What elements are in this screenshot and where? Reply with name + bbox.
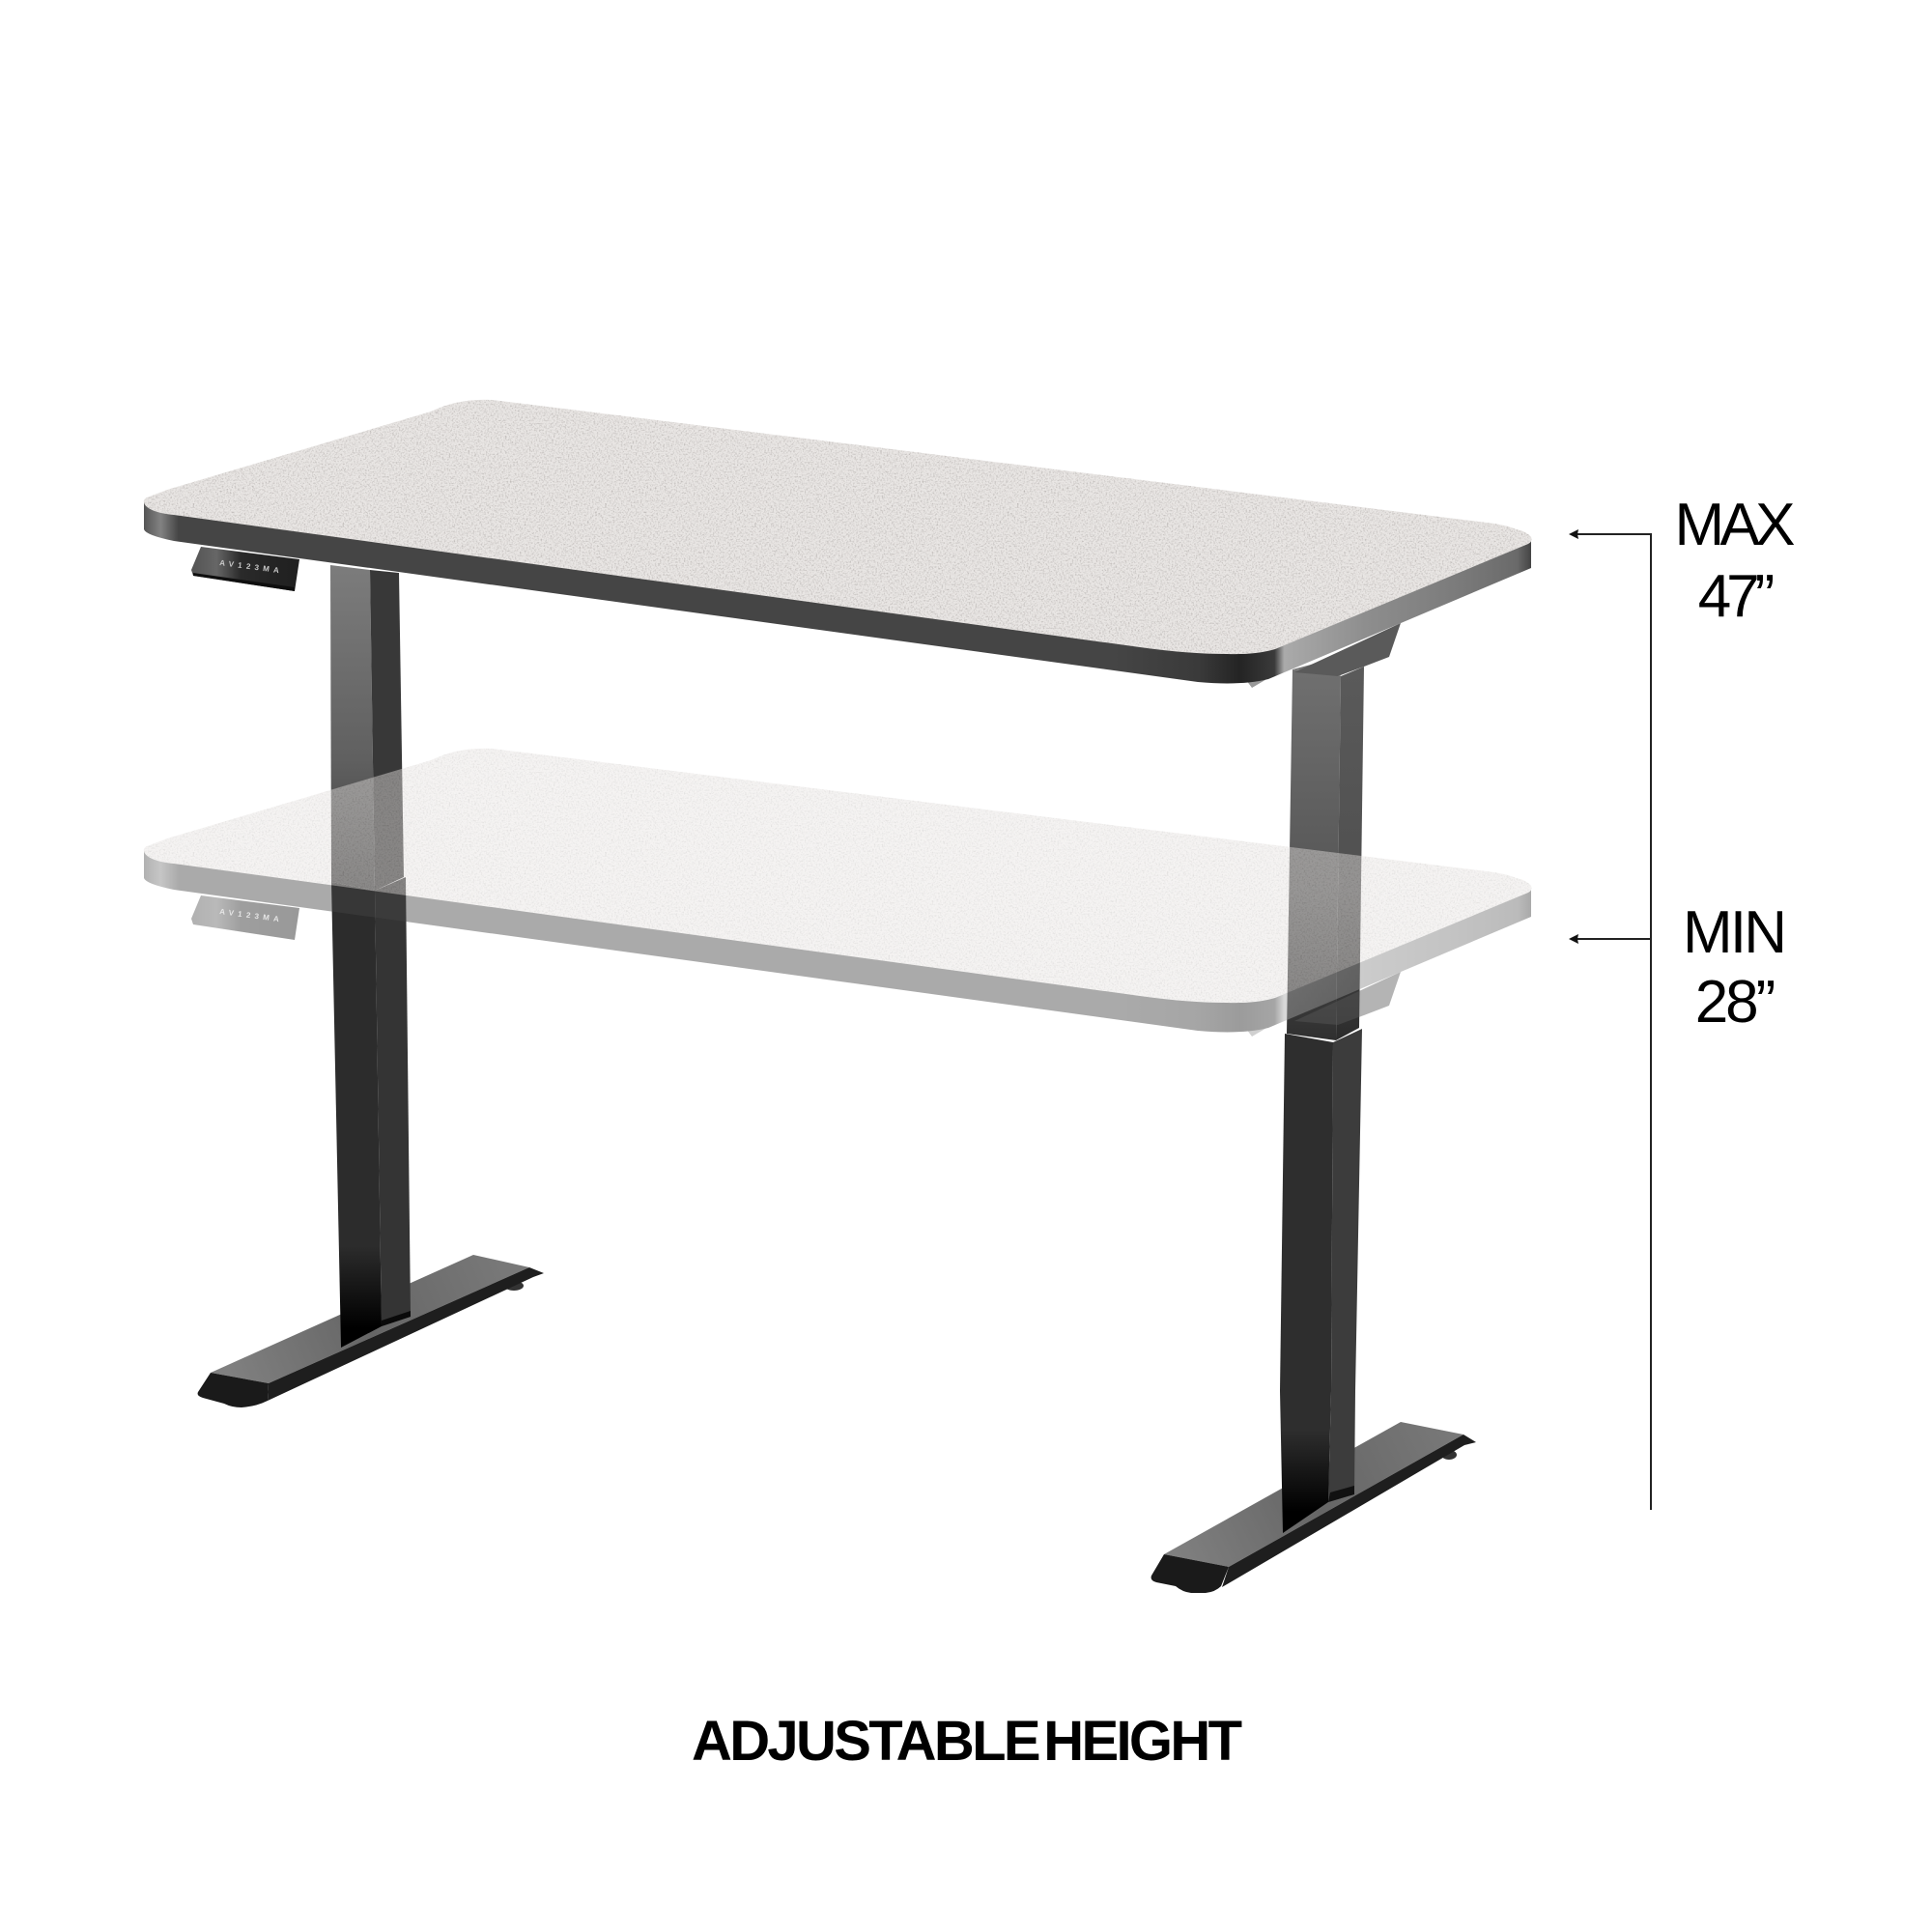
label: minimum height: MIN — [1683, 899, 1787, 966]
desk top ghost at minimum height — [144, 749, 1532, 1037]
label: maximum height: 47” — [1698, 563, 1774, 630]
surface ghost — [144, 749, 1532, 1003]
right leg lower section — [1280, 1029, 1362, 1533]
left foot — [198, 1255, 544, 1407]
desktop bracket under top desk — [1294, 623, 1401, 676]
right leg upper section — [1287, 659, 1364, 1040]
left leg lower section — [331, 877, 411, 1348]
desk edge band — [144, 502, 1531, 683]
control keypad (raised desk): AV123MA — [219, 558, 280, 575]
left leg upper section — [330, 565, 404, 891]
keypad ghost — [191, 895, 299, 940]
control keypad (raised desk) — [191, 547, 299, 591]
right foot — [1151, 1422, 1476, 1593]
label: maximum height: MAX — [1675, 492, 1795, 558]
edge band ghost — [144, 851, 1531, 1032]
keypad ghost: AV123MA — [219, 907, 280, 923]
label: maximum height — [1675, 492, 1795, 630]
bracket tab under top desk — [1246, 678, 1268, 688]
label: minimum height: 28” — [1695, 969, 1775, 1036]
tab ghost — [1246, 1027, 1268, 1037]
bracket ghost — [1294, 972, 1401, 1025]
desk top at maximum height — [144, 400, 1532, 683]
caption: ADJUSTABLE HEIGHT — [692, 1710, 1242, 1773]
label: minimum height — [1683, 899, 1787, 1036]
height bracket with arrows — [1569, 529, 1652, 1510]
desk surface — [144, 400, 1532, 654]
